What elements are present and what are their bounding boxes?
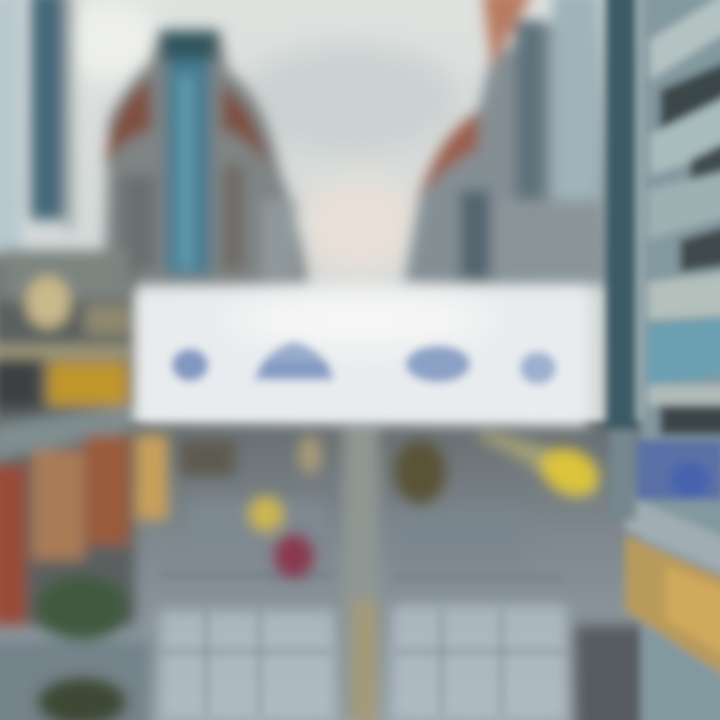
right pillar [605,0,637,520]
banner icon 3 [406,346,470,382]
banner icon 2 [254,342,334,380]
right mid building [404,0,610,285]
central white banner [138,288,588,426]
left edge tower [0,0,74,260]
banner panel [138,288,588,426]
traffic: cars [248,435,322,578]
central pole [343,425,379,720]
banner icon 1 [172,349,208,381]
street trees [36,440,446,720]
central rounded building [104,30,308,285]
road [0,420,720,720]
banner icon 4 [520,352,556,384]
yellow awning [480,430,606,505]
right balcony building [625,0,720,720]
left storefront building [0,250,168,625]
